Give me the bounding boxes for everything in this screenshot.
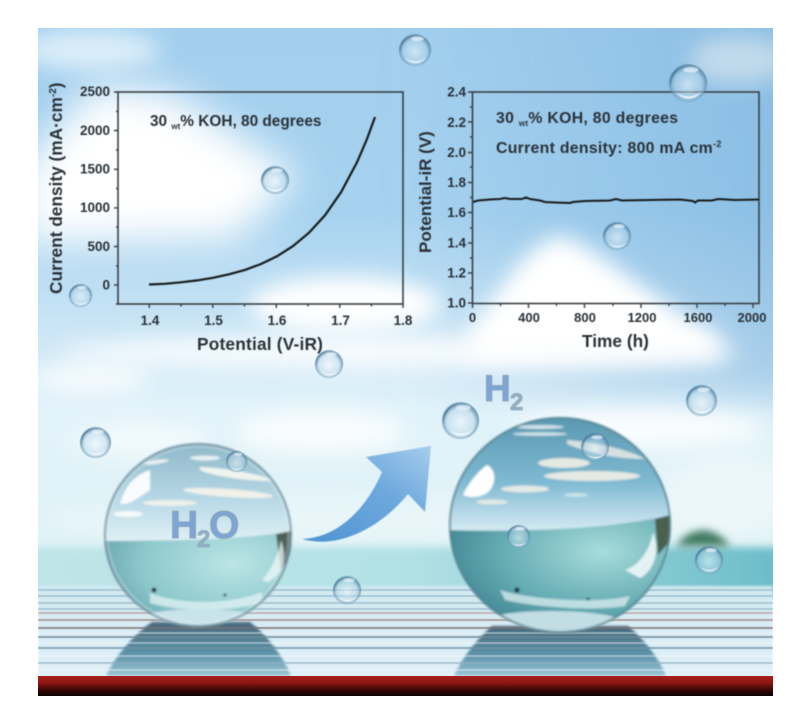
curve — [149, 117, 375, 284]
axes frame — [114, 92, 403, 308]
curve — [473, 198, 759, 203]
axes frame — [468, 92, 759, 308]
text: H2 — [484, 368, 523, 416]
clouds — [20, 30, 800, 542]
text: H2O: O — [209, 504, 239, 547]
text: H2: 2 — [510, 389, 523, 416]
axis title: time: Time (h) — [582, 331, 649, 351]
y tick labels: 1.2 — [447, 266, 466, 280]
axis title: potential: Potential (V-iR) — [197, 334, 323, 354]
x tick labels: 400 — [518, 310, 540, 325]
x tick labels: 1.8 — [394, 313, 413, 328]
right glass sphere — [445, 417, 675, 640]
red base bar — [38, 676, 773, 696]
droplet — [399, 34, 431, 66]
annotation lines: Current density: 800 mA cm — [496, 140, 713, 157]
droplet — [669, 64, 707, 102]
droplet — [226, 451, 247, 472]
annotation lines: -2 — [713, 139, 722, 149]
left glass sphere — [100, 443, 295, 640]
x tick labels: 2000 — [738, 310, 766, 325]
droplet — [603, 222, 631, 250]
annotation lines: wt — [518, 119, 528, 128]
y tick labels: 1000 — [80, 200, 110, 215]
y tick labels — [447, 84, 466, 310]
x tick labels: 1.6 — [268, 313, 287, 328]
reflection: left sphere — [106, 622, 291, 676]
x tick labels: 1.4 — [141, 313, 160, 328]
droplet — [80, 427, 111, 458]
droplet — [315, 350, 343, 378]
x tick labels: 800 — [574, 310, 596, 325]
x tick labels: 1.7 — [331, 313, 350, 328]
annotation lines: % KOH, 80 degrees — [528, 110, 678, 127]
axis title: current density: Current density (mA·cm — [46, 97, 66, 294]
y tick labels: 2.4 — [447, 84, 466, 100]
chart: stability curve — [416, 84, 766, 351]
y tick labels: 1.0 — [447, 296, 466, 310]
y tick labels: 1500 — [80, 162, 110, 176]
text: H2O: 2 — [197, 526, 210, 553]
y tick labels — [80, 84, 110, 292]
droplet — [333, 576, 361, 604]
annotation: 30 — [150, 113, 167, 130]
droplet — [507, 525, 530, 548]
text: H2: H — [484, 368, 511, 409]
reflection: right sphere — [454, 626, 666, 676]
y tick labels: 2.2 — [447, 115, 466, 130]
axis title: current density: ) — [46, 82, 66, 88]
annotation: % KOH, 80 degrees — [180, 113, 321, 130]
text: H2O — [170, 504, 239, 553]
y tick labels: 1.4 — [447, 236, 466, 250]
x tick labels: 1.5 — [204, 313, 223, 328]
y tick labels: 0 — [102, 278, 110, 292]
deck stripes — [38, 590, 773, 670]
droplet — [261, 166, 289, 194]
x tick labels: 1600 — [684, 310, 712, 325]
text: H2O: H — [170, 504, 198, 547]
annotation: wt — [170, 122, 181, 131]
arrow — [302, 446, 431, 542]
annotation lines: 30 — [496, 110, 514, 127]
x tick labels — [469, 310, 766, 325]
y tick labels: 1.8 — [447, 175, 466, 190]
y tick labels: 2000 — [80, 123, 110, 138]
x tick labels — [141, 313, 413, 328]
droplet — [442, 402, 479, 439]
y tick labels: 1.6 — [447, 205, 466, 220]
droplet — [686, 385, 717, 416]
sea — [20, 547, 800, 597]
droplet — [69, 284, 92, 307]
droplet — [695, 546, 723, 574]
y tick labels: 2500 — [80, 84, 110, 99]
island — [676, 530, 730, 546]
droplet — [581, 433, 609, 461]
axis title: current density: -2 — [48, 88, 59, 97]
y tick labels: 500 — [87, 239, 110, 254]
chart: polarization curve — [46, 82, 413, 354]
y tick labels: 2.0 — [447, 145, 466, 160]
water droplets — [69, 34, 723, 604]
axis title: potential-iR: Potential-iR (V) — [416, 131, 435, 253]
x tick labels: 1200 — [628, 310, 656, 325]
annotation lines — [496, 110, 722, 157]
x tick labels: 0 — [469, 310, 476, 325]
